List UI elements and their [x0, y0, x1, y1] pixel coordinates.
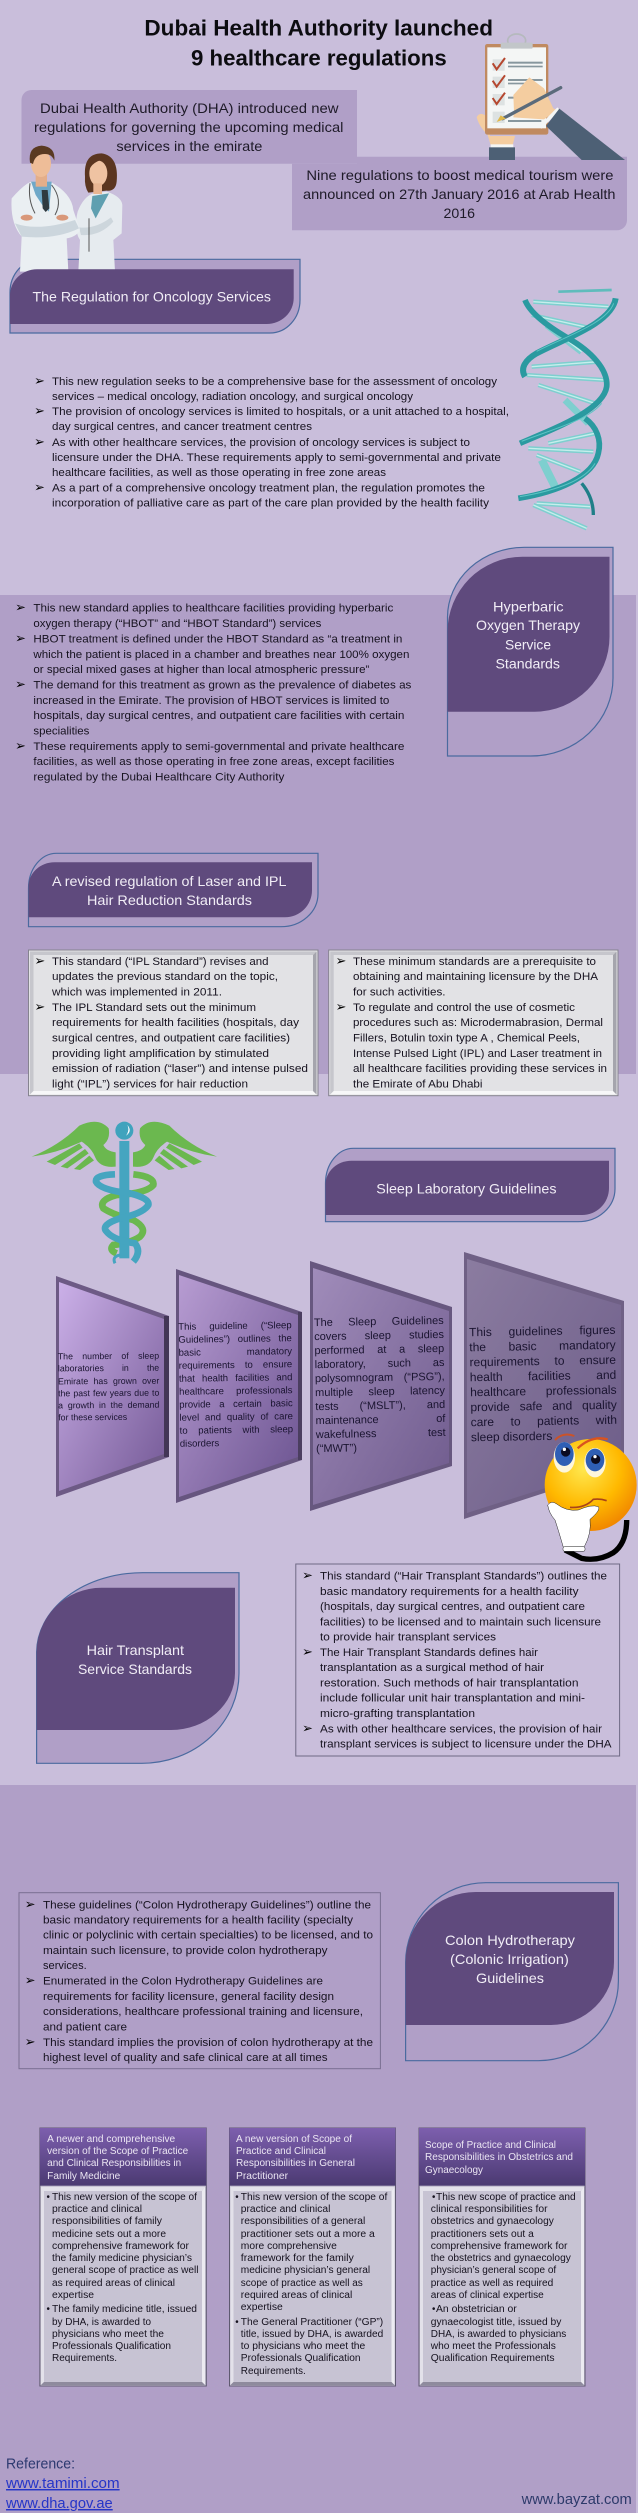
card: obstetrics and gynaecology: •	[432, 2192, 436, 2203]
panel: oncology bullet list: As with other healthcare services, the provision of oncology services is subject to	[52, 437, 470, 449]
card: general practitioner: expertise	[241, 2302, 283, 2313]
panel: introduction: regulations for governing the upcoming medical	[34, 119, 343, 135]
icon: clipboard and hand	[477, 34, 625, 160]
panel: announcement: Nine regulations to boost medical tourism were	[306, 167, 614, 183]
panel: hyperbaric bullet list	[15, 601, 412, 784]
panel: colon hydrotherapy bullet list	[19, 1893, 380, 2069]
panel: colon hydrotherapy heading: Colon Hydrotherapy	[445, 1932, 575, 1948]
panel: hyperbaric bullet list: The demand for this treatment as grown as the prevalence of diabetes as	[33, 680, 412, 692]
panel: laser standard box two: To regulate and control the use of cosmetic	[353, 1002, 576, 1014]
card: family medicine: expertise	[52, 2290, 94, 2301]
card: general practitioner: practitioner sets out a more a	[241, 2229, 375, 2240]
panel: introduction: Dubai Health Authority (DHA) introduced new	[40, 100, 339, 116]
panel: hyperbaric bullet list: facilities, as well as those operating in free zone areas, except facilities	[33, 756, 395, 768]
card: family medicine: This new version of the scope of	[52, 2192, 197, 2203]
panel: laser standard box two: all healthcare facilities providing these services in	[353, 1063, 607, 1075]
card: obstetrics and gynaecology: physician’s general scope of	[431, 2265, 557, 2276]
panel: sleep step two: level and quality of care	[179, 1410, 293, 1423]
card: family medicine: general scope of practice as well	[52, 2265, 198, 2276]
panel: hair transplant bullet list: The Hair Transplant Standards defines hair	[320, 1647, 538, 1659]
panel: sleep step four: sleep disorders	[471, 1430, 552, 1445]
panel: laser standard box one: The IPL Standard sets out the minimum	[52, 1002, 256, 1014]
panel: hair transplant bullet list: basic mandatory requirements for a health facility	[320, 1586, 579, 1598]
panel: laser standard box two: ➢	[336, 1000, 346, 1015]
panel: laser standard box two: ➢	[336, 954, 346, 969]
panel: oncology heading: The Regulation for Oncology Services	[32, 289, 271, 305]
panel: laser standard box one: surgical centres, and outpatient care facilities)	[52, 1033, 290, 1045]
panel: hair transplant bullet list: to provide hair transplant services	[320, 1631, 497, 1643]
panel: colon hydrotherapy bullet list: considerations, healthcare professional training and licensure,	[43, 2006, 363, 2018]
panel: laser standard box two: Fillers, Botulin toxin type A , Chemical Peels,	[353, 1033, 580, 1045]
card: general practitioner: more comprehensive	[241, 2241, 337, 2252]
panel: hyperbaric bullet list: ➢	[15, 601, 26, 616]
panel: hair transplant bullet list: (hospitals, day surgical centres, and outpatient care	[320, 1601, 585, 1613]
panel: sleep step four: the basic mandatory	[469, 1338, 616, 1355]
card: obstetrics and gynaecology: areas of clinical expertise	[431, 2290, 544, 2301]
card: general practitioner: to physicians who meet the	[241, 2341, 365, 2352]
panel: oncology bullet list: healthcare facilities, as well as those operating in free zone areas	[52, 467, 387, 479]
panel: oncology heading	[10, 269, 294, 324]
card: general practitioner: practice and clinical	[241, 2204, 330, 2215]
panel: hair transplant bullet list: As with other healthcare services, the provision of hair	[320, 1723, 602, 1735]
panel: sleep step three: tests (“MSLT”), and	[315, 1399, 445, 1413]
card: general practitioner: medicine physician’s general	[241, 2265, 370, 2276]
panel: laser standard box two: procedures such as: Microdermabrasion, Dermal	[353, 1017, 603, 1029]
footer: references: Reference:	[6, 2456, 75, 2472]
panel: hyperbaric bullet list: HBOT treatment is defined under the HBOT Standard as “a treatment in	[33, 634, 402, 646]
panel: introduction	[22, 90, 357, 164]
panel: sleep step three: (“MWT”)	[316, 1442, 357, 1455]
panel: oncology bullet list	[34, 374, 509, 510]
panel: sleep step two: provide a certain basic	[179, 1397, 293, 1410]
panel: sleep step four	[464, 1252, 624, 1519]
panel: sleep step four: healthcare professionals	[470, 1383, 617, 1400]
panel: hair transplant heading: Service Standards	[78, 1661, 192, 1677]
card: family medicine: A newer and comprehensive	[47, 2134, 175, 2145]
panel: laser standard box one: ➢	[34, 954, 45, 969]
card: obstetrics and gynaecology	[419, 2128, 585, 2386]
panel: laser standard box one: This standard (“IPL Standard”) revises and	[52, 956, 268, 968]
panel: hyperbaric bullet list: ➢	[15, 678, 26, 693]
panel: colon hydrotherapy bullet list: services.	[43, 1960, 87, 1972]
panel: hyperbaric bullet list: This new standard applies to healthcare facilities providing hyperbaric	[33, 603, 394, 615]
icon: thinking emoji	[544, 1434, 637, 1562]
panel: colon hydrotherapy bullet list: maintain such licensure, to provide colon hydrotherapy	[43, 1945, 328, 1957]
panel: sleep heading	[326, 1148, 615, 1222]
panel: sleep step two: disorders	[180, 1437, 219, 1449]
card: general practitioner: •	[235, 2317, 239, 2328]
panel: hair transplant bullet list: transplantation as a surgical method of hair	[320, 1662, 544, 1674]
card: family medicine: by DHA, is awarded to	[52, 2317, 151, 2328]
panel: laser standard box two: the Emirate of Abu Dhabi	[353, 1079, 482, 1091]
panel: oncology bullet list: ➢	[34, 481, 45, 496]
card: family medicine: practice and clinical	[52, 2204, 142, 2215]
card: obstetrics and gynaecology: clinical responsibilities for	[431, 2204, 548, 2215]
card: general practitioner: responsibilities of a general	[241, 2216, 365, 2227]
icon: DNA helix	[518, 290, 616, 528]
panel: sleep step four: provide safe and quality	[470, 1398, 617, 1415]
panel: sleep step four: health facilities and	[470, 1368, 616, 1385]
panel: sleep step two: requirements to ensure	[179, 1359, 292, 1371]
panel: sleep step three	[310, 1261, 452, 1511]
panel: sleep step two: that health facilities and	[179, 1372, 292, 1384]
panel: hyperbaric bullet list: specialities	[33, 726, 90, 738]
panel: colon hydrotherapy heading	[406, 1883, 618, 2061]
panel: oncology bullet list: ➢	[34, 374, 45, 389]
card: family medicine: and Clinical Responsibilities in	[47, 2158, 181, 2169]
card: general practitioner: The General Practitioner (“GP”)	[241, 2317, 383, 2328]
card: family medicine: the family medicine physician’s	[52, 2253, 192, 2264]
panel: oncology bullet list: ➢	[34, 404, 45, 419]
card: general practitioner: scope of practice as well as	[241, 2278, 363, 2289]
card: family medicine: The family medicine title, issued	[52, 2304, 197, 2315]
card: obstetrics and gynaecology: who meet the Professionals	[430, 2341, 556, 2352]
panel: sleep step four: This guidelines figures	[469, 1323, 616, 1340]
card: family medicine: version of the Scope of Practice	[47, 2146, 188, 2157]
panel: colon hydrotherapy bullet list: requirements for facility licensure, general facility design	[43, 1991, 334, 2003]
icon: two doctors	[11, 146, 122, 272]
panel: sleep step four: care to patients with	[471, 1413, 617, 1430]
card: general practitioner: framework for the family	[241, 2253, 354, 2264]
panel: oncology bullet list: This new regulation seeks to be a comprehensive base for the assessment of oncology	[52, 376, 498, 388]
panel: sleep step one: laboratories in the	[58, 1363, 159, 1374]
panel: sleep step three: The Sleep Guidelines	[313, 1315, 443, 1329]
panel: colon hydrotherapy heading: Guidelines	[476, 1970, 544, 1986]
panel: introduction: services in the emirate	[116, 138, 263, 154]
card: general practitioner: A new version of Scope of	[236, 2134, 352, 2145]
card: family medicine: medicine sets out a more	[52, 2229, 166, 2240]
panel: sleep step two: to patients with sleep	[180, 1423, 293, 1436]
panel: sleep step one: The number of sleep	[58, 1351, 159, 1361]
card: obstetrics and gynaecology: comprehensive framework for	[431, 2241, 568, 2252]
panel: sleep step three: polysomnogram (“PSG”),	[314, 1371, 444, 1385]
panel: hair transplant bullet list: include follicular unit hair transplantation and mini-	[320, 1693, 585, 1705]
panel: hyperbaric bullet list: which the patient is placed in a chamber and breathes near 100% oxygen	[32, 649, 409, 661]
panel: hair transplant bullet list: ➢	[302, 1568, 313, 1583]
card: general practitioner: Requirements.	[241, 2366, 306, 2377]
panel: sleep step three: laboratory, such as	[314, 1357, 444, 1371]
panel: colon hydrotherapy bullet list: ➢	[25, 1897, 36, 1912]
panel: sleep step two: This guideline (“Sleep	[178, 1320, 292, 1332]
panel: sleep step one: Emirate has grown over	[58, 1375, 159, 1386]
card: obstetrics and gynaecology: Scope of Practice and Clinical	[425, 2140, 556, 2151]
card: family medicine: Professionals Qualification	[52, 2341, 171, 2352]
card: family medicine: Family Medicine	[47, 2171, 120, 2182]
panel: hyperbaric heading: Service	[505, 636, 551, 652]
panel: laser standard box one: emission of radiation (“laser”) and intense pulsed	[52, 1063, 308, 1075]
panel: colon hydrotherapy bullet list: ➢	[25, 2035, 36, 2050]
panel: oncology bullet list: ➢	[34, 435, 45, 450]
card: family medicine: Requirements.	[52, 2353, 117, 2364]
panel: hyperbaric bullet list: or special mixed gases at higher than local atmospheric pressure”	[33, 664, 370, 676]
card: family medicine: •	[46, 2192, 50, 2203]
panel: sleep heading: Sleep Laboratory Guidelines	[376, 1180, 556, 1196]
panel: hyperbaric bullet list: regulated by the Dubai Healthcare City Authority	[33, 772, 285, 784]
title	[144, 16, 493, 71]
panel: hair transplant bullet list: restoration. Such methods of hair transplantation	[320, 1677, 578, 1689]
card: general practitioner	[230, 2128, 396, 2386]
panel: hyperbaric bullet list: hospitals, day surgical centres, and outpatient care facilities with certain	[33, 710, 404, 722]
panel: hair transplant bullet list: ➢	[302, 1645, 313, 1660]
panel: hair transplant heading: Hair Transplant	[87, 1642, 184, 1658]
panel: laser standard box one: ➢	[34, 1000, 45, 1015]
card: obstetrics and gynaecology: Responsibilities in Obstetrics and	[425, 2152, 573, 2163]
panel: laser standard box two: These minimum standards are a prerequisite to	[353, 956, 596, 968]
panel: hair transplant bullet list: ➢	[302, 1721, 313, 1736]
card: family medicine: •	[46, 2304, 50, 2315]
card: obstetrics and gynaecology: •	[432, 2304, 436, 2315]
panel: laser standard box two: Intense Pulsed Light (IPL) and Laser treatment in	[353, 1048, 602, 1060]
card: family medicine: responsibilities of family	[52, 2216, 162, 2227]
card: general practitioner: Practice and Clinical	[236, 2146, 326, 2157]
panel: hair transplant bullet list: transplant services is subject to licensure under the DHA	[320, 1739, 612, 1751]
panel: oncology bullet list: day surgical centres, and cancer treatment centres	[52, 421, 313, 433]
panel: hyperbaric heading: Hyperbaric	[493, 599, 564, 615]
panel: laser standard box one: which was implemented in 2011.	[51, 987, 222, 999]
panel: sleep step one	[56, 1276, 169, 1497]
panel: sleep step three: covers sleep studies	[314, 1329, 444, 1343]
card: family medicine: physicians who meet the	[52, 2329, 164, 2340]
panel: oncology bullet list: incorporation of palliative care as part of the care plan provided by the health facility	[52, 498, 490, 510]
panel: sleep step three: maintenance of	[315, 1413, 445, 1427]
card: general practitioner: Practitioner	[236, 2171, 289, 2182]
panel: laser standard box one: providing light amplification by stimulated	[52, 1048, 269, 1060]
panel: sleep step one: a growth in the demand	[58, 1400, 160, 1411]
panel: hair transplant bullet list	[296, 1564, 620, 1756]
card: general practitioner: title, issued by DHA, is awarded	[241, 2329, 383, 2340]
card: obstetrics and gynaecology: practitioners sets out a	[431, 2229, 534, 2240]
panel: laser standard box one: light (“IPL”) services for hair reduction	[52, 1079, 248, 1091]
card: general practitioner: •	[235, 2192, 239, 2203]
panel: sleep step three: multiple sleep latency	[315, 1385, 445, 1399]
panel: hair transplant bullet list: This standard (“Hair Transplant Standards”) outlines the	[320, 1570, 607, 1582]
panel: sleep step two	[176, 1269, 302, 1503]
panel: sleep step two: healthcare professionals	[179, 1384, 293, 1397]
panel: sleep step two: Guidelines”) outlines the	[178, 1333, 292, 1345]
panel: oncology bullet list: The provision of oncology services is limited to hospitals, or a unit attached to a hospital,	[52, 406, 509, 418]
panel: announcement	[292, 157, 627, 230]
panel: hair transplant heading	[37, 1573, 239, 1763]
panel: hyperbaric bullet list: ➢	[15, 739, 26, 754]
panel: colon hydrotherapy heading: (Colonic Irrigation)	[450, 1951, 569, 1967]
card: obstetrics and gynaecology: An obstetrician or	[436, 2304, 518, 2315]
panel: laser standard box two: obtaining and maintaining licensure by the DHA	[353, 971, 599, 983]
card: general practitioner: This new version of the scope of	[241, 2192, 388, 2203]
card: obstetrics and gynaecology: gynaecologist title, issued by	[431, 2317, 562, 2328]
footer: references	[5, 2456, 120, 2512]
panel: colon hydrotherapy bullet list: clinic or polyclinic with certain specialties) to be licensed, and to	[43, 1929, 373, 1941]
card: general practitioner: Professionals Qualification	[241, 2353, 360, 2364]
panel: hair transplant bullet list: micro-grafting transplantation	[320, 1708, 475, 1720]
panel: sleep step one: the past few years due to	[58, 1388, 160, 1398]
panel: sleep step one: for these services	[58, 1412, 127, 1423]
card: family medicine: as required areas of clinical	[52, 2278, 175, 2289]
panel: oncology bullet list: As a part of a comprehensive oncology treatment plan, the regulation promotes the	[52, 483, 485, 495]
panel: announcement: announced on 27th January 2016 at Arab Health	[303, 186, 616, 202]
panel: hair transplant bullet list: facilities) to be licensed and to maintain such licensure	[320, 1616, 601, 1628]
panel: sleep step three: performed at a sleep	[314, 1343, 444, 1357]
panel: colon hydrotherapy bullet list: These guidelines (“Colon Hydrotherapy Guidelines”) outline the	[43, 1899, 371, 1911]
panel: hyperbaric bullet list: These requirements apply to semi-governmental and private healthcare	[33, 741, 404, 753]
title: Dubai Health Authority launched	[144, 16, 493, 41]
panel: laser heading: Hair Reduction Standards	[87, 892, 252, 908]
card: obstetrics and gynaecology: Qualification Requirements	[431, 2353, 555, 2364]
title: 9 healthcare regulations	[191, 46, 447, 71]
card: obstetrics and gynaecology: obstetrics and gynaecology	[431, 2216, 554, 2227]
card: general practitioner: required areas of clinical	[241, 2290, 352, 2301]
panel: hyperbaric heading: Standards	[496, 655, 560, 671]
card: obstetrics and gynaecology: This new scope of practice and	[436, 2192, 576, 2203]
panel: colon hydrotherapy bullet list: This standard implies the provision of colon hydrotherapy at the	[43, 2037, 373, 2049]
panel: hyperbaric bullet list: oxygen therapy (“HBOT” and “HBOT Standard”) services	[33, 618, 322, 630]
panel: sleep step three: wakefulness test	[315, 1427, 445, 1441]
card: obstetrics and gynaecology: the obstetrics and gynaecology	[431, 2253, 571, 2264]
panel: laser heading: A revised regulation of Laser and IPL	[52, 873, 287, 889]
panel: laser standard box two	[329, 950, 618, 1096]
footer: references: www.tamimi.com	[5, 2476, 120, 2492]
panel: colon hydrotherapy bullet list: and patient care	[43, 2021, 127, 2033]
panel: laser standard box one	[28, 950, 318, 1096]
panel: colon hydrotherapy bullet list: ➢	[25, 1973, 36, 1988]
panel: sleep step four: requirements to ensure	[469, 1353, 616, 1370]
panel: hyperbaric heading: Oxygen Therapy	[476, 617, 580, 633]
footer: references: www.dha.gov.ae	[5, 2496, 113, 2512]
card: obstetrics and gynaecology: DHA, is awarded to physicians	[431, 2329, 566, 2340]
panel: hyperbaric bullet list: increased in the Emirate. The provision of HBOT services is limited to	[33, 695, 389, 707]
footer: website: www.bayzat.com	[521, 2492, 632, 2508]
icon: caduceus	[32, 1122, 217, 1263]
panel: oncology heading outline	[10, 259, 300, 333]
panel: colon hydrotherapy bullet list: highest level of quality and safe clinical care at all times	[43, 2052, 328, 2064]
card: family medicine	[40, 2128, 206, 2386]
card: obstetrics and gynaecology: Gynaecology	[425, 2165, 483, 2176]
panel: laser standard box one: updates the previous standard on the topic,	[52, 971, 278, 983]
band: upper dark background	[0, 595, 636, 1074]
panel: hyperbaric bullet list: ➢	[15, 632, 26, 647]
panel: colon hydrotherapy bullet list: Enumerated in the Colon Hydrotherapy Guidelines are	[43, 1975, 323, 1987]
panel: laser heading	[28, 853, 318, 927]
panel: sleep step two: basic mandatory	[178, 1346, 292, 1358]
panel: laser standard box two: for such activities.	[353, 987, 446, 999]
panel: hyperbaric heading	[447, 547, 613, 756]
panel: laser standard box one: requirements for health facilities (hospitals, day	[52, 1017, 300, 1029]
panel: colon hydrotherapy bullet list: basic mandatory requirements for a health facility (specialty	[43, 1914, 354, 1926]
card: general practitioner: Responsibilities in General	[236, 2158, 355, 2169]
card: family medicine: comprehensive framework for	[52, 2241, 190, 2252]
card: obstetrics and gynaecology: practice as well as required	[431, 2278, 553, 2289]
panel: oncology bullet list: services – medical oncology, radiation oncology, and surgical oncology	[52, 391, 414, 403]
panel: announcement: 2016	[444, 205, 475, 221]
band: lower dark background	[0, 1785, 636, 2513]
panel: oncology bullet list: licensure under the DHA. These requirements apply to semi-governmental and private	[52, 452, 501, 464]
